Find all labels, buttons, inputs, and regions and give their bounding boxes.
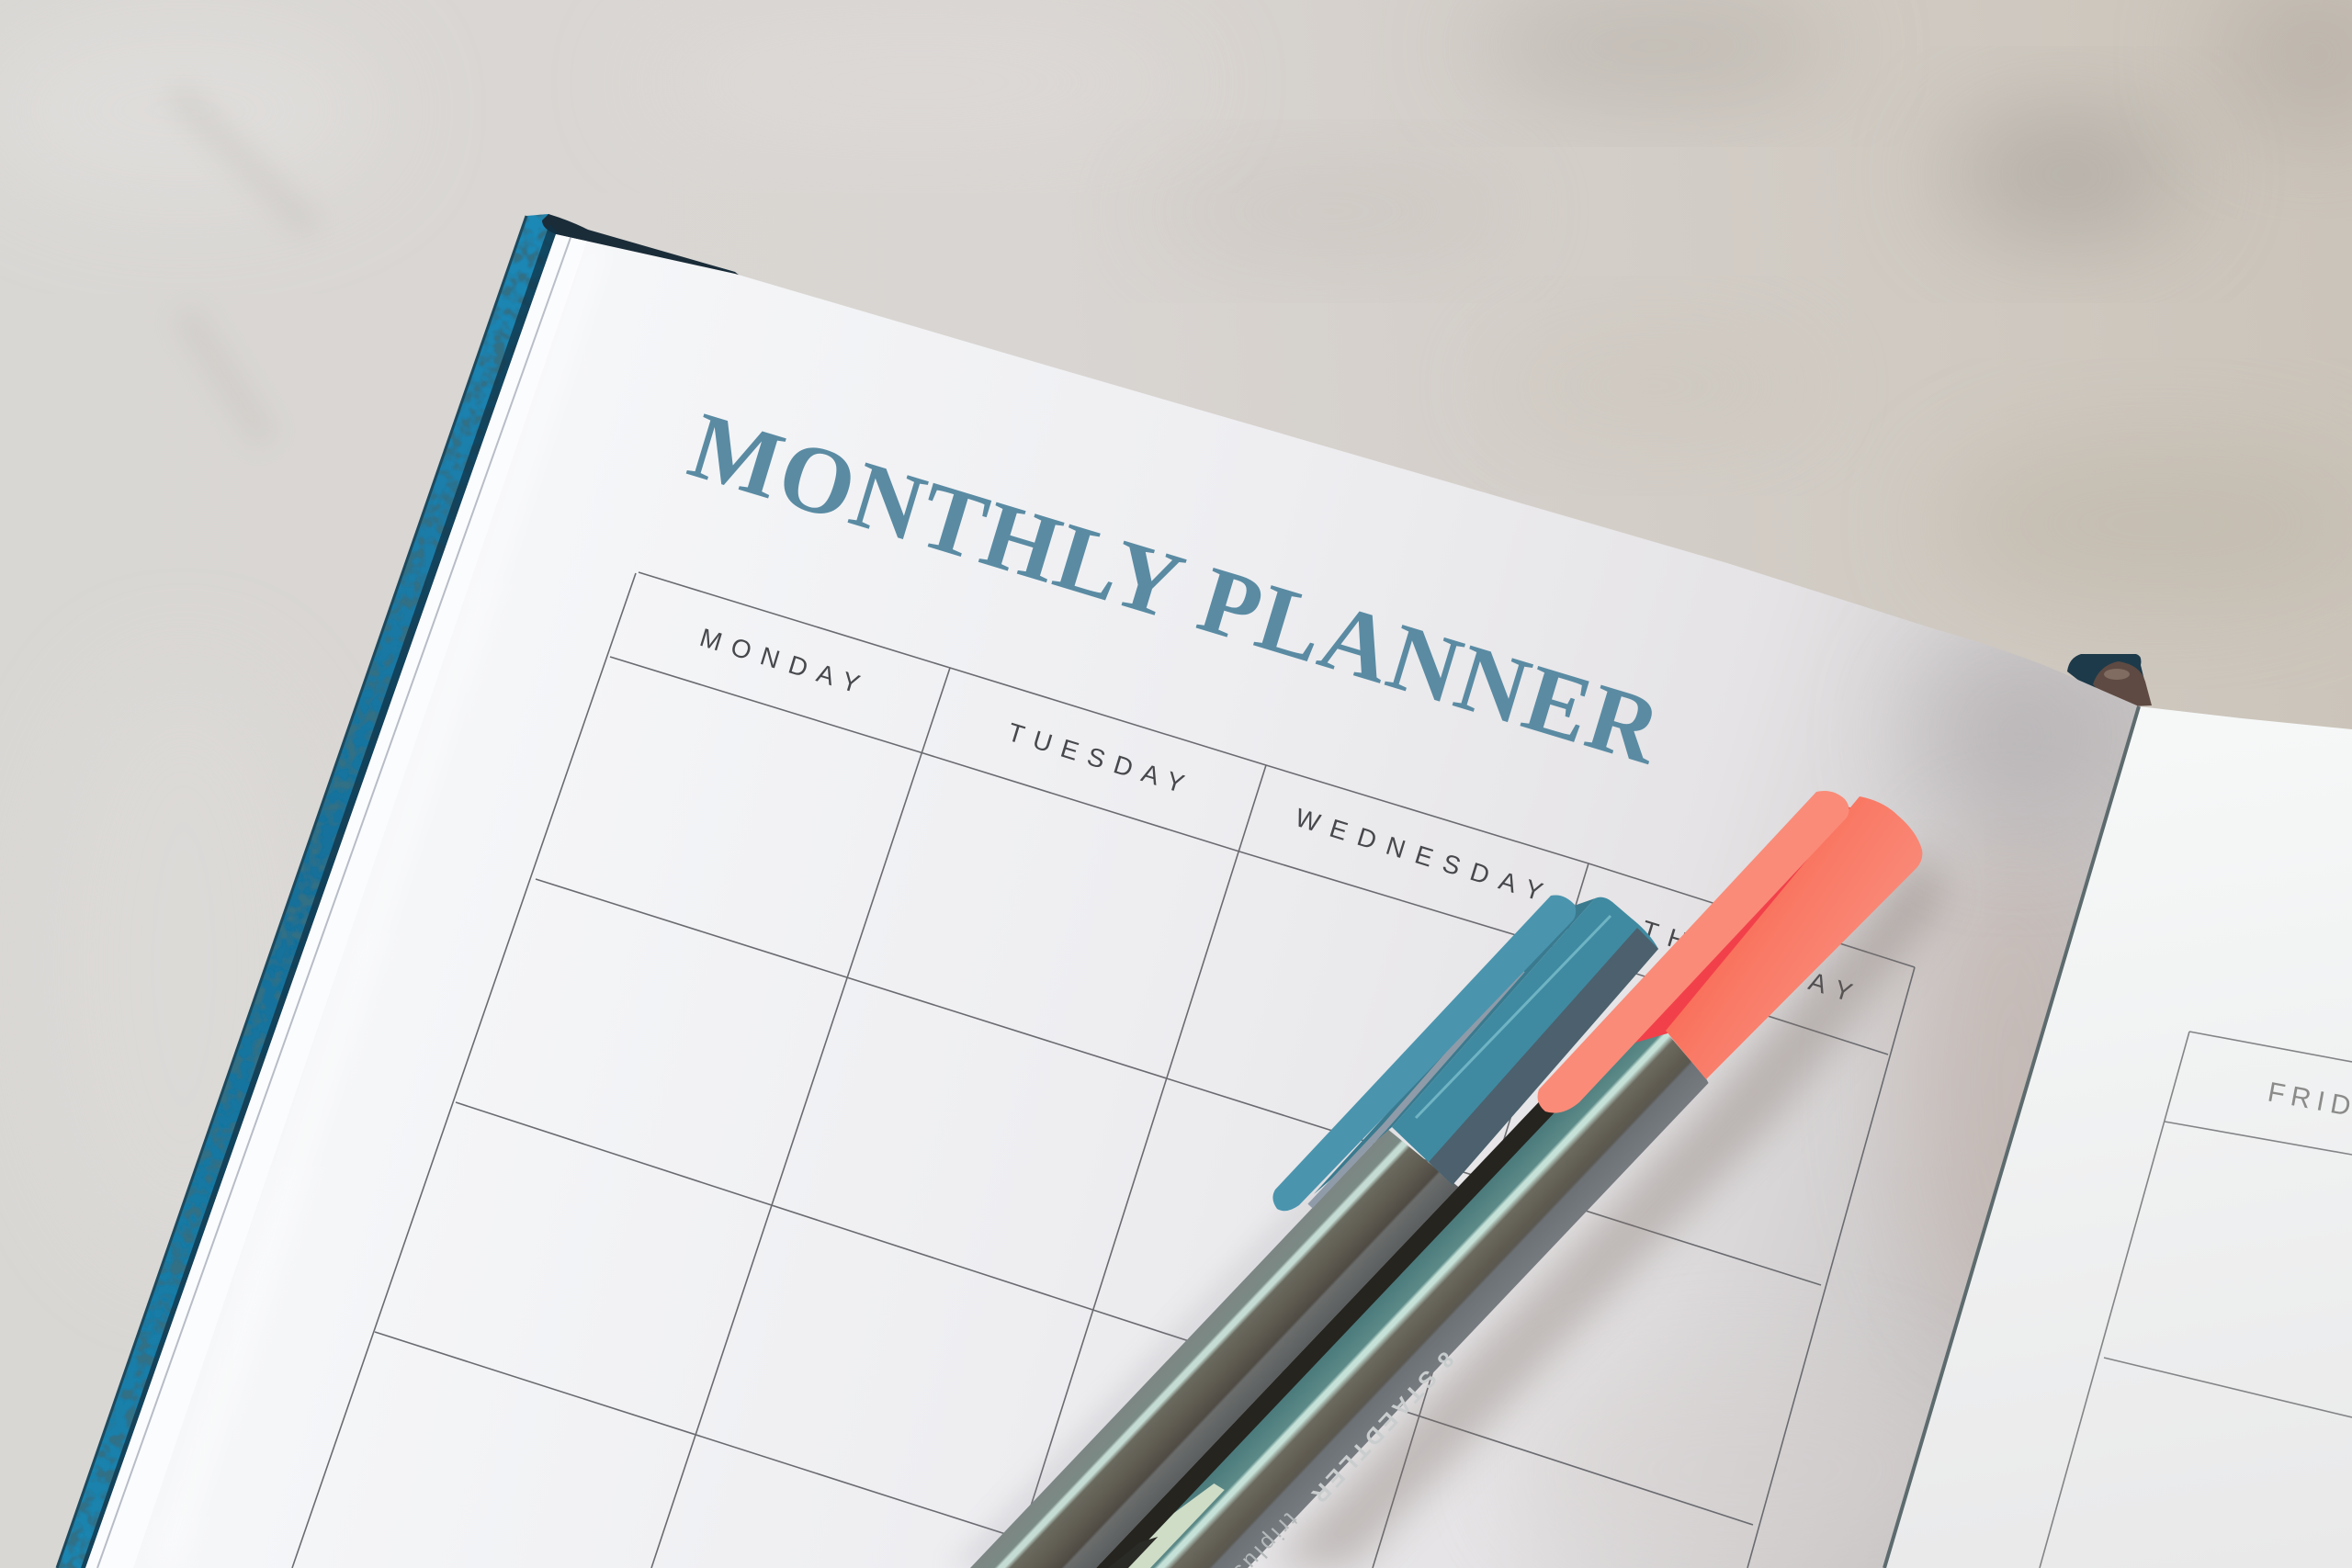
blue pen: [966, 895, 1658, 1568]
title: MONTHLY PLANNER: [678, 392, 1674, 785]
page stack edge: [85, 234, 588, 1568]
calendar grid: [292, 572, 1915, 1568]
staedtler: STAEDTLER: [1306, 1365, 1442, 1507]
notebook cover spine: [57, 214, 740, 1568]
warm page shading: [1891, 846, 2082, 1303]
registered mark: 8: [1432, 1347, 1458, 1372]
left planner page: [85, 234, 2139, 1568]
friday grid: [2040, 1032, 2352, 1568]
thursday: THURSDAY: [1638, 915, 1856, 1007]
tuesday: TUESDAY: [1004, 717, 1188, 798]
ribbon tab behind hinge: [2067, 654, 2152, 707]
binding gutter: [1884, 706, 2139, 1568]
weekday labels: [696, 623, 1856, 1007]
coral cap body: [1666, 796, 1922, 1079]
coral pen barrel: [1103, 1029, 1760, 1568]
coral channel: [1635, 807, 1865, 1043]
blue cap highlight: [1416, 916, 1611, 1118]
monday: MONDAY: [696, 623, 864, 698]
pen shadows: [946, 850, 1948, 1568]
barcode sticker: [1122, 1483, 1230, 1568]
blue cap body: [1392, 897, 1658, 1185]
right planner page: [1884, 706, 2352, 1568]
brand text: [1227, 1347, 1458, 1568]
silver inlay: [1310, 970, 1522, 1206]
coral pen: [1103, 791, 1922, 1568]
coral pocket clip: [1538, 791, 1849, 1113]
blue pocket clip: [1272, 895, 1576, 1211]
blue cap shaded side: [1429, 928, 1658, 1185]
blue cap channel: [1314, 898, 1595, 1194]
wednesday: WEDNESDAY: [1292, 803, 1546, 907]
blue pen barrel: [966, 1072, 1595, 1568]
